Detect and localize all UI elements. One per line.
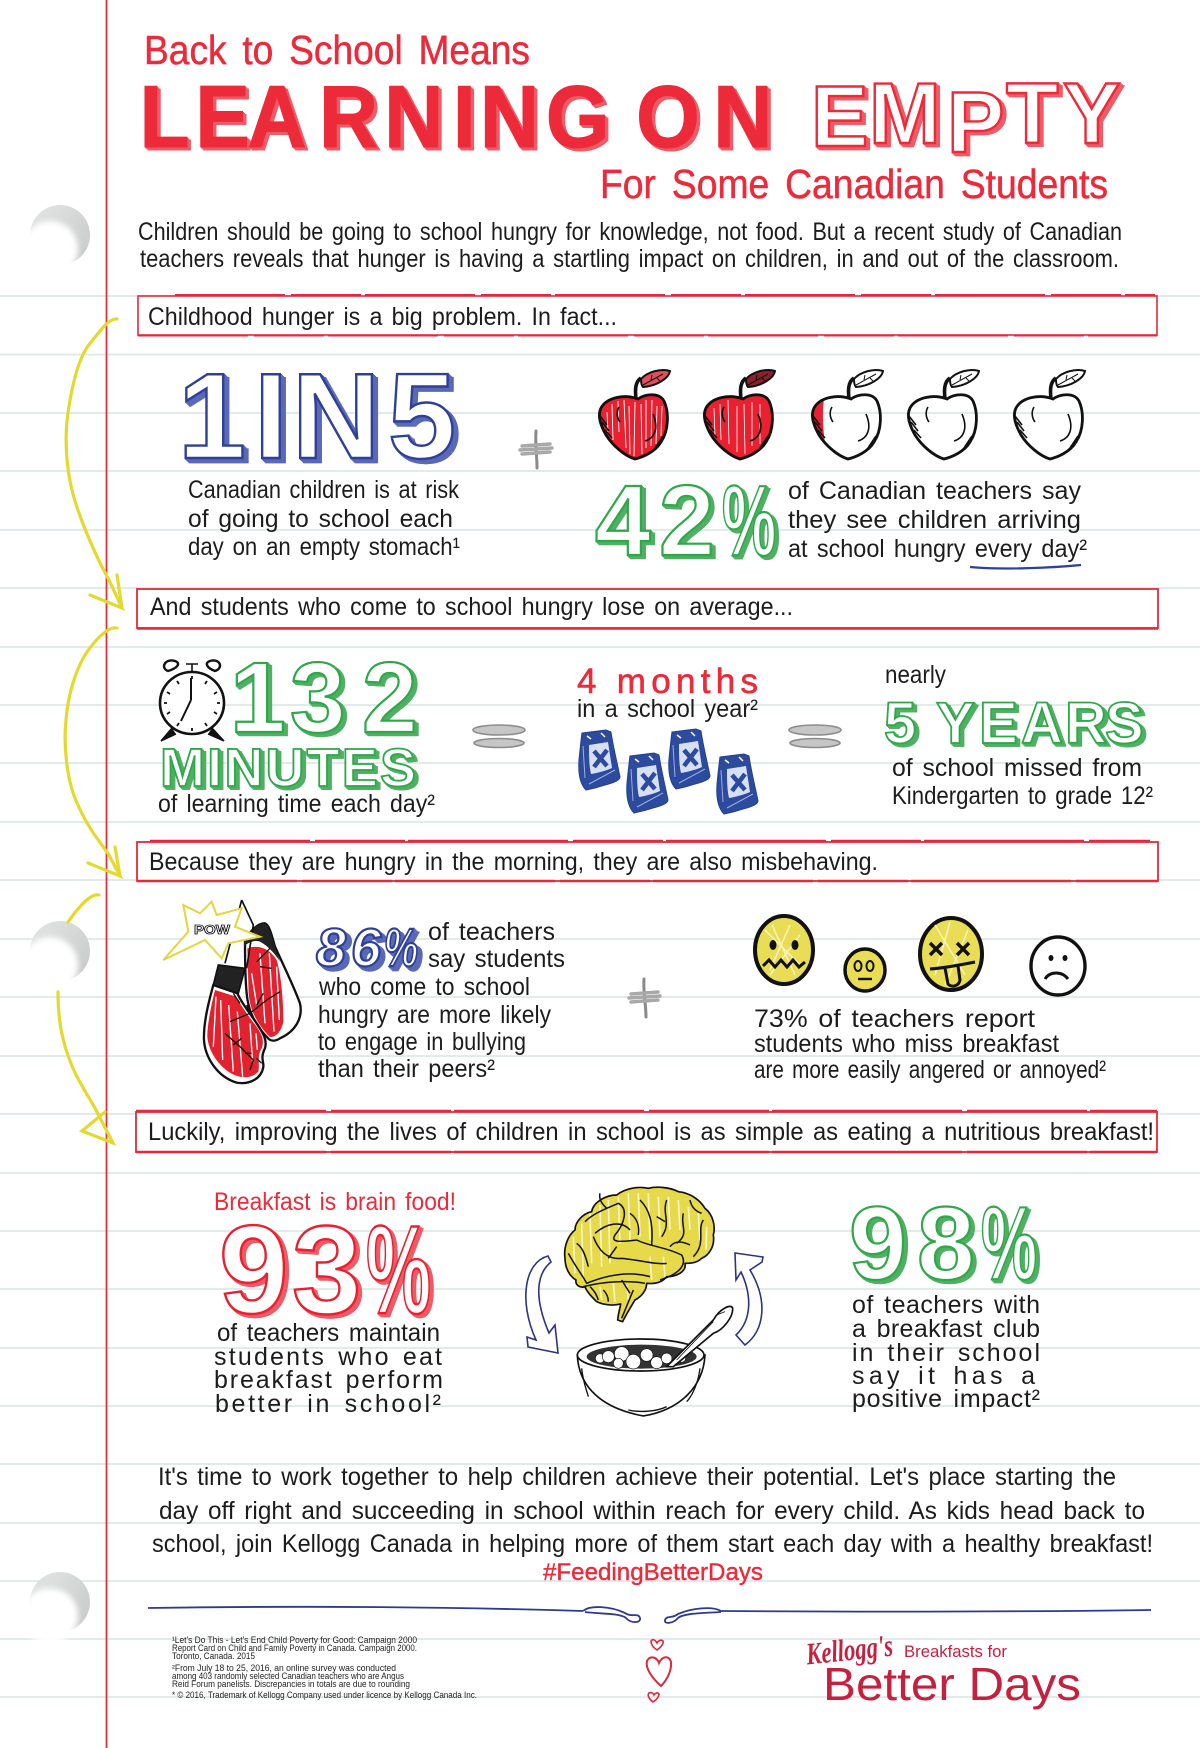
stat: 98%: %	[981, 1186, 1037, 1302]
banner: misbehaving: Because they are hungry in the morning, they are also misbehaving.	[149, 848, 878, 876]
icon: plus	[520, 431, 552, 468]
text: 93% of teachers: students who eat	[214, 1343, 442, 1371]
logo: kellogg's breakfasts for better days: Kellogg's	[804, 1628, 895, 1672]
text: canadian children: day on an empty stomach¹	[188, 533, 460, 561]
text: school missed: Kindergarten to grade 12²	[892, 782, 1153, 810]
stat: 93%: 93	[219, 1201, 362, 1340]
text: bullying: of teachers	[428, 918, 555, 946]
title: Learning on Empty: ON	[636, 68, 772, 167]
stat: 132: 132	[230, 642, 418, 754]
footnotes: ¹Let's Do This - Let's End Child Poverty for Good: Campaign 2000	[172, 1635, 417, 1645]
footnotes: Reid Forum panelists. Discrepancies in totals are due to rounding	[172, 1679, 410, 1689]
banner: luckily: Luckily, improving the lives of children in school is as simple as eating a nutritious breakfast!	[148, 1118, 1154, 1146]
stat: 98%	[849, 1186, 1037, 1302]
text: bullying: who come to school	[318, 973, 530, 1001]
apple 1 red	[599, 370, 670, 459]
closing paragraph: school, join Kellogg Canada in helping more of them start each day with a healthy breakfast!	[152, 1530, 1153, 1558]
footnotes: * © 2016, Trademark of Kellogg Company used under licence by Kellogg Canada Inc.	[172, 1690, 477, 1700]
footnotes: Report Card on Child and Family Poverty in Canada. Campaign 2000.	[172, 1643, 417, 1653]
flourish divider	[148, 1607, 1151, 1623]
text: bullying: say students	[428, 945, 565, 973]
banner: students lose: And students who come to school hungry lose on average...	[150, 593, 793, 621]
icon: boxing gloves with pow	[163, 900, 301, 1083]
title: Learning on Empty	[140, 66, 1120, 171]
text: 93% of teachers: of teachers maintain	[217, 1319, 440, 1347]
apple 5 empty	[1014, 370, 1085, 459]
stat: 86%: 86	[316, 918, 382, 978]
banner: misbehaving	[137, 841, 1158, 881]
text: breakfast is brain food: Breakfast is brain food!	[214, 1188, 456, 1216]
apple 3 partly red	[812, 370, 883, 459]
stat: 98%: 98	[849, 1186, 975, 1302]
stat: 4 months: 4 months	[577, 662, 758, 701]
logo: kellogg's breakfasts for better days: Better Days	[823, 1658, 1081, 1710]
banner: students lose	[137, 589, 1158, 628]
text: bullying	[318, 918, 565, 1083]
text: canadian children	[188, 476, 460, 561]
icon: plus	[629, 979, 660, 1017]
footnotes: among 403 randomly selected Canadian teachers who are Angus	[172, 1671, 404, 1681]
text: 98% of teachers: positive impact²	[852, 1385, 1040, 1413]
binder hole 1	[22, 205, 90, 277]
footnotes: ²From July 18 to 25, 2016, an online survey was conducted	[172, 1663, 396, 1673]
text: 73% of teachers: are more easily angered or annoyed²	[754, 1056, 1106, 1084]
text: 42% of teachers	[788, 477, 1087, 563]
intro text	[138, 218, 1122, 273]
face 1	[755, 916, 813, 984]
text: 98% of teachers: of teachers with	[852, 1291, 1040, 1319]
icon: alarm clock	[160, 660, 224, 741]
text: school missed	[892, 754, 1153, 810]
text: bullying: hungry are more likely	[318, 1001, 551, 1029]
subtitle: For Some Canadian Students	[600, 161, 1108, 207]
stat: 5 years: 5 YEARS	[884, 691, 1144, 756]
underline: every day	[970, 565, 1081, 568]
stat: 93%	[219, 1201, 431, 1340]
icon: boxing gloves with pow: POW	[194, 922, 230, 937]
icon: five apples	[599, 370, 1085, 459]
text: 42% of teachers: of Canadian teachers say	[788, 477, 1081, 505]
text: in a school year: in a school year²	[577, 695, 758, 723]
icon: cycle arrow right	[735, 1253, 763, 1345]
yellow arrow 2	[65, 628, 120, 876]
stat: 42%: 42	[595, 465, 715, 577]
icon: four faces	[755, 916, 1085, 995]
yellow arrow 1	[66, 319, 122, 608]
footnotes: Toronto, Canada. 2015	[172, 1651, 255, 1661]
banner: childhood hunger	[138, 295, 1157, 336]
text: 73% of teachers: 73% of teachers report	[754, 1005, 1035, 1033]
stat: 93%: %	[366, 1201, 431, 1340]
text: 93% of teachers: better in school²	[215, 1390, 441, 1418]
face 3	[920, 918, 982, 990]
stat: 42%	[595, 465, 776, 577]
text: 73% of teachers: students who miss breakfast	[754, 1030, 1059, 1058]
face 2	[845, 949, 885, 991]
stat: 1 in 5: 1IN5	[178, 348, 456, 484]
closing paragraph	[152, 1463, 1153, 1558]
icon: calendars	[579, 729, 758, 814]
stat: 86%	[316, 918, 418, 978]
banner: childhood hunger: Childhood hunger is a big problem. In fact...	[148, 303, 617, 331]
hashtag: #FeedingBetterDays	[543, 1559, 763, 1586]
icon: hearts	[647, 1640, 671, 1702]
closing paragraph: It's time to work together to help children achieve their potential. Let's place starting the	[158, 1463, 1116, 1491]
stat: minutes: MINUTES	[160, 738, 416, 798]
title: Learning on Empty: LEARNING	[140, 68, 610, 167]
text: nearly: nearly	[885, 661, 946, 689]
closing paragraph: day off right and succeeding in school within reach for every child. As kids head back to	[159, 1497, 1145, 1525]
logo: kellogg's breakfasts for better days	[804, 1628, 1081, 1710]
title: Learning on Empty: EMPTY	[811, 66, 1120, 171]
stat: 86%: %	[384, 918, 418, 978]
icon: equals 2	[789, 725, 841, 748]
stat: 42%: %	[722, 465, 776, 577]
text: 98% of teachers: a breakfast club	[852, 1315, 1040, 1343]
icon: cereal bowl	[577, 1306, 733, 1416]
text: 98% of teachers	[852, 1291, 1040, 1413]
face 4	[1031, 937, 1085, 995]
footnotes	[172, 1635, 477, 1700]
red margin line	[106, 0, 108, 1748]
apple 4 empty	[908, 370, 979, 459]
yellow arrow 3	[58, 895, 113, 1143]
text: 42% of teachers: at school hungry every day²	[788, 535, 1087, 563]
text: 42% of teachers: they see children arriving	[788, 506, 1081, 534]
apple 2 red	[704, 370, 775, 459]
icon: brain	[565, 1187, 714, 1322]
logo: kellogg's breakfasts for better days: Breakfasts for	[904, 1642, 1007, 1661]
title: Back to School Means: Back to School Means	[144, 27, 530, 73]
text: 93% of teachers: breakfast perform	[214, 1366, 443, 1394]
icon: equals 1	[473, 725, 525, 748]
text: school missed: of school missed from	[892, 754, 1142, 782]
text: 93% of teachers	[214, 1319, 443, 1418]
text: canadian children: of going to school each	[188, 505, 453, 533]
binder hole 3	[22, 1572, 90, 1644]
banner: luckily	[136, 1111, 1157, 1152]
text: bullying: than their peers²	[318, 1055, 495, 1083]
binder hole 2	[22, 921, 90, 993]
icon: cycle arrow left	[526, 1256, 558, 1353]
text: 98% of teachers: in their school	[852, 1339, 1040, 1367]
text: canadian children: Canadian children is at risk	[188, 476, 459, 504]
text: 73% of teachers	[754, 1005, 1106, 1084]
text: bullying: to engage in bullying	[318, 1028, 526, 1056]
text: learning time: of learning time each day²	[158, 790, 435, 818]
text: 98% of teachers: say it has a	[852, 1362, 1035, 1390]
